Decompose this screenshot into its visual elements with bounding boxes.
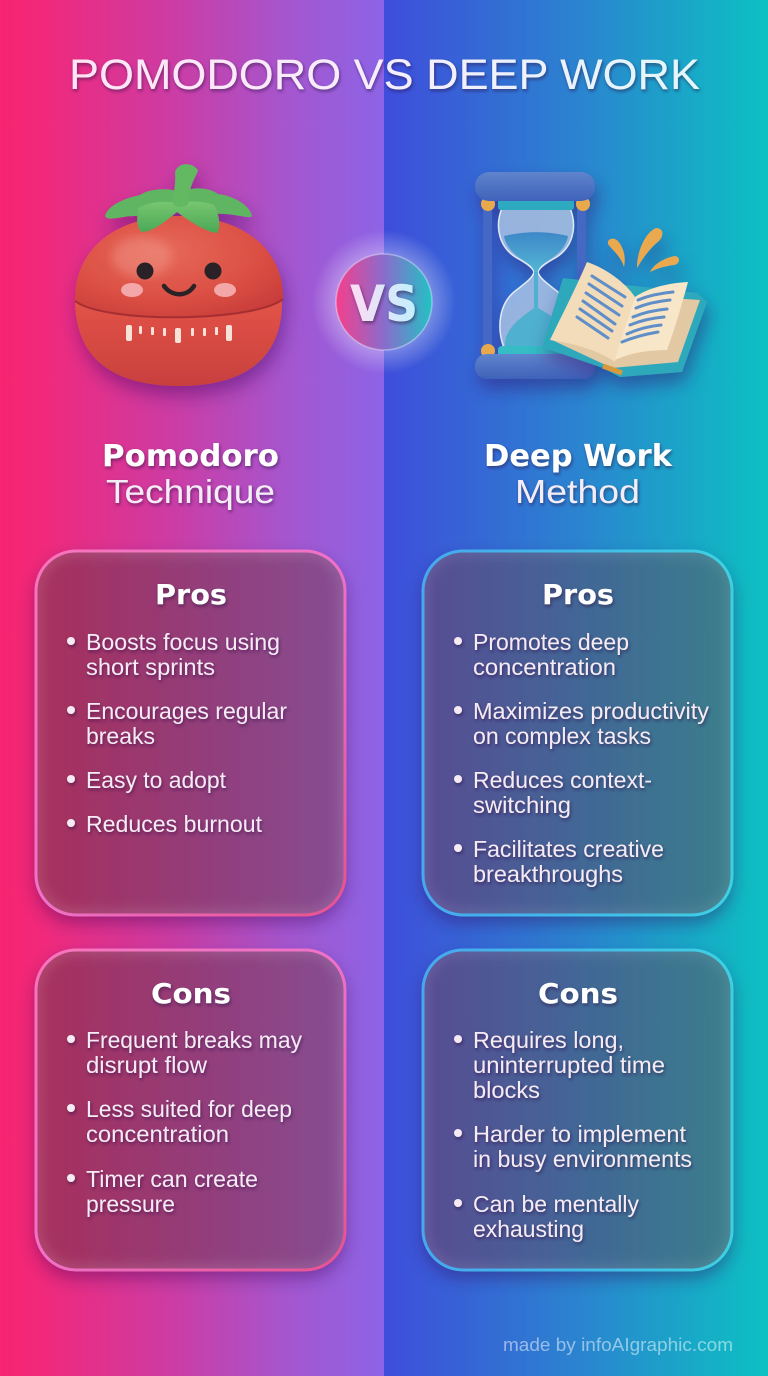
panel heading: Cons: Cons — [538, 977, 618, 1010]
list: Deep Work cons: uninterrupted time — [473, 1052, 665, 1078]
panel heading: Pros: Pros — [542, 578, 614, 611]
panel: Deep Work cons — [423, 950, 732, 1270]
heading: Pomodoro Technique: Technique — [106, 473, 275, 510]
heading: Pomodoro Technique — [102, 439, 279, 510]
icon: hourglass — [475, 172, 595, 379]
list: Deep Work cons: blocks — [473, 1077, 540, 1103]
list: Pomodoro pros: breaks — [86, 723, 155, 749]
list: Deep Work pros: concentration — [473, 654, 616, 680]
icon: VS badge — [312, 230, 456, 374]
list: Pomodoro cons: Timer can create — [86, 1166, 258, 1192]
list: Pomodoro cons: Less suited for deep — [86, 1096, 292, 1122]
panel: Deep Work pros — [423, 551, 732, 915]
list: Pomodoro pros: short sprints — [86, 654, 215, 680]
list: Deep Work pros: Reduces context- — [473, 767, 652, 793]
panel heading: Pros: Pros — [155, 578, 227, 611]
list: Deep Work pros: Facilitates creative — [473, 836, 664, 862]
list: Deep Work pros: Promotes deep — [473, 629, 629, 655]
icon: VS badge: VS — [350, 275, 418, 333]
icon: open book with splashes — [542, 228, 707, 377]
background: left half gradient — [0, 0, 384, 1376]
list: Pomodoro pros: Easy to adopt — [86, 767, 227, 793]
background: right half gradient — [384, 0, 768, 1376]
list: Pomodoro cons: disrupt flow — [86, 1052, 207, 1078]
list: Deep Work cons: Requires long, — [473, 1027, 624, 1053]
icon part: timer ticks — [126, 325, 232, 343]
list: Deep Work pros: switching — [473, 792, 571, 818]
heading: Pomodoro Technique: Pomodoro — [102, 439, 279, 474]
list: Deep Work cons: exhausting — [473, 1216, 584, 1242]
list: Deep Work cons: Harder to implement — [473, 1121, 687, 1147]
list: Pomodoro cons: Frequent breaks may — [86, 1027, 302, 1053]
panel heading: Cons: Cons — [151, 977, 231, 1010]
list: Deep Work pros: on complex tasks — [473, 723, 651, 749]
icon: tomato timer — [75, 164, 283, 386]
list: Deep Work pros: breakthroughs — [473, 861, 623, 887]
list: Pomodoro cons: concentration — [86, 1121, 229, 1147]
list: Pomodoro pros: Reduces burnout — [86, 811, 263, 837]
watermark: made by infoAIgraphic.com — [503, 1335, 733, 1355]
heading: Deep Work Method: Method — [515, 473, 640, 510]
list: Pomodoro cons — [67, 1027, 302, 1217]
list: Deep Work cons: Can be mentally — [473, 1191, 639, 1217]
list: Deep Work pros — [454, 629, 710, 887]
icon part: splashes — [608, 228, 679, 272]
title: POMODORO VS DEEP WORK — [69, 51, 700, 99]
heading: Deep Work Method: Deep Work — [484, 439, 673, 474]
icon part: leaves and stem — [105, 164, 252, 233]
icon part: face — [121, 262, 236, 297]
panel: Pomodoro cons — [36, 950, 345, 1270]
list: Pomodoro pros: Encourages regular — [86, 698, 287, 724]
heading: Deep Work Method — [484, 439, 673, 510]
list: Deep Work pros: Maximizes productivity — [473, 698, 710, 724]
list: Pomodoro pros: Boosts focus using — [86, 629, 280, 655]
list: Deep Work cons — [454, 1027, 692, 1242]
list: Pomodoro cons: pressure — [86, 1191, 175, 1217]
panel: Pomodoro pros — [36, 551, 345, 915]
list: Pomodoro pros — [67, 629, 287, 837]
list: Deep Work cons: in busy environments — [473, 1146, 692, 1172]
